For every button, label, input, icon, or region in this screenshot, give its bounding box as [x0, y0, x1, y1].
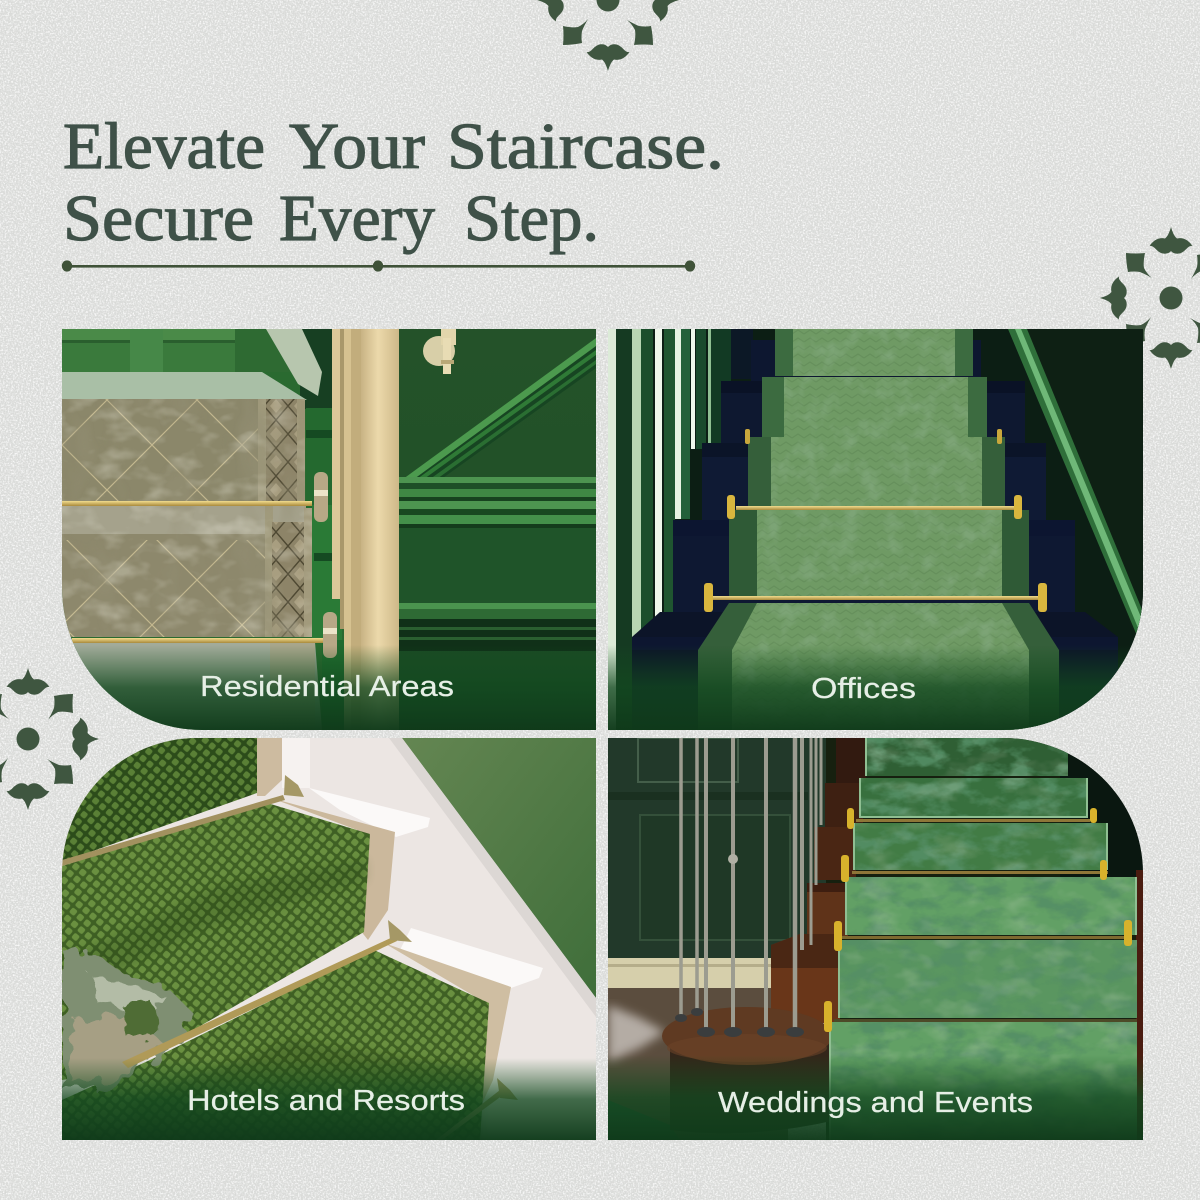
title: Every [279, 182, 435, 255]
photo: baluster bases [675, 854, 804, 1037]
photo: panelled wall [399, 329, 596, 686]
photo: carpet mottling [62, 399, 312, 637]
photo: upper landing wall [62, 329, 332, 409]
title: Your [289, 110, 425, 183]
photo: lowest tread [62, 642, 322, 730]
photo: lower carpet [62, 950, 489, 1140]
panel: weddings and events [608, 738, 1143, 1140]
panel: residential areas [62, 329, 596, 730]
photo: navy stair treads and risers [632, 340, 1118, 730]
photo: bottom fade [608, 645, 1143, 730]
icon: wall bracket fixture [423, 329, 456, 374]
photo: white string edge [389, 738, 596, 1017]
photo: stair rods [62, 775, 518, 1140]
title: Staircase. [447, 110, 724, 183]
title underline with dots [62, 260, 695, 272]
title: Step. [464, 182, 599, 255]
photo: green wall background [62, 372, 344, 730]
photo: upper tread [62, 372, 307, 400]
photo: white tread noses [282, 738, 543, 988]
photo: brass stair rods [834, 819, 1137, 1022]
photo: green strip by stairs [306, 408, 344, 660]
photo: dark background [608, 329, 1143, 730]
title: Secure [63, 182, 254, 255]
photo: white staircase background [62, 738, 596, 1091]
photo: beige border, second step [271, 798, 395, 940]
photo: stair rod two [72, 612, 337, 658]
photo: dark top right void [1060, 738, 1143, 878]
photo: stair rod one [62, 472, 328, 522]
photo: stair runner [698, 329, 1059, 730]
photo: brown side strip [1136, 870, 1143, 1140]
photo: gold brackets [824, 808, 1132, 1032]
panel: offices [608, 329, 1143, 730]
photo: beige border, third step [384, 943, 511, 1110]
panel: hotels and resorts [62, 738, 596, 1140]
ornament: top centre [537, 0, 679, 71]
photo: dark backing behind runner [826, 738, 1137, 1140]
photo: round newel base [662, 1007, 836, 1133]
photo: cushion [266, 329, 322, 396]
photo: wooden steps [771, 738, 866, 1023]
photo: left slatted light wall [608, 329, 753, 730]
label: hotels and resorts: Hotels and Resorts [187, 1085, 465, 1117]
photo: floor [608, 988, 788, 1140]
photo: middle carpet [62, 802, 370, 1080]
photo: right wall and handrail [1008, 329, 1143, 660]
photo: bottom fade [62, 645, 596, 730]
photo: metal balusters [681, 738, 821, 1032]
photo: dark panelled wall [608, 738, 848, 960]
label: offices: Offices [811, 673, 916, 705]
photo: newel post [361, 329, 399, 730]
photo: first carpet riser [62, 399, 305, 504]
photo: baseboard [608, 958, 778, 988]
photo: top carpet [62, 738, 282, 862]
photo: bottom fade [62, 1058, 596, 1140]
ornament: right [1100, 227, 1200, 369]
photo: second carpet tread and riser [62, 506, 312, 637]
photo: balusters [332, 329, 362, 730]
photo: green damask runner [830, 738, 1137, 1140]
label: weddings and events: Weddings and Events [718, 1087, 1033, 1119]
photo: bottom fade [608, 1055, 1143, 1140]
title: Elevate [63, 110, 265, 183]
photo: foreground foliage [62, 950, 190, 1090]
label: residential areas: Residential Areas [200, 671, 454, 703]
title [63, 110, 724, 255]
photo: green wall [402, 738, 596, 998]
photo: stair rods and brackets [704, 429, 1047, 612]
ornament: left [0, 668, 99, 810]
